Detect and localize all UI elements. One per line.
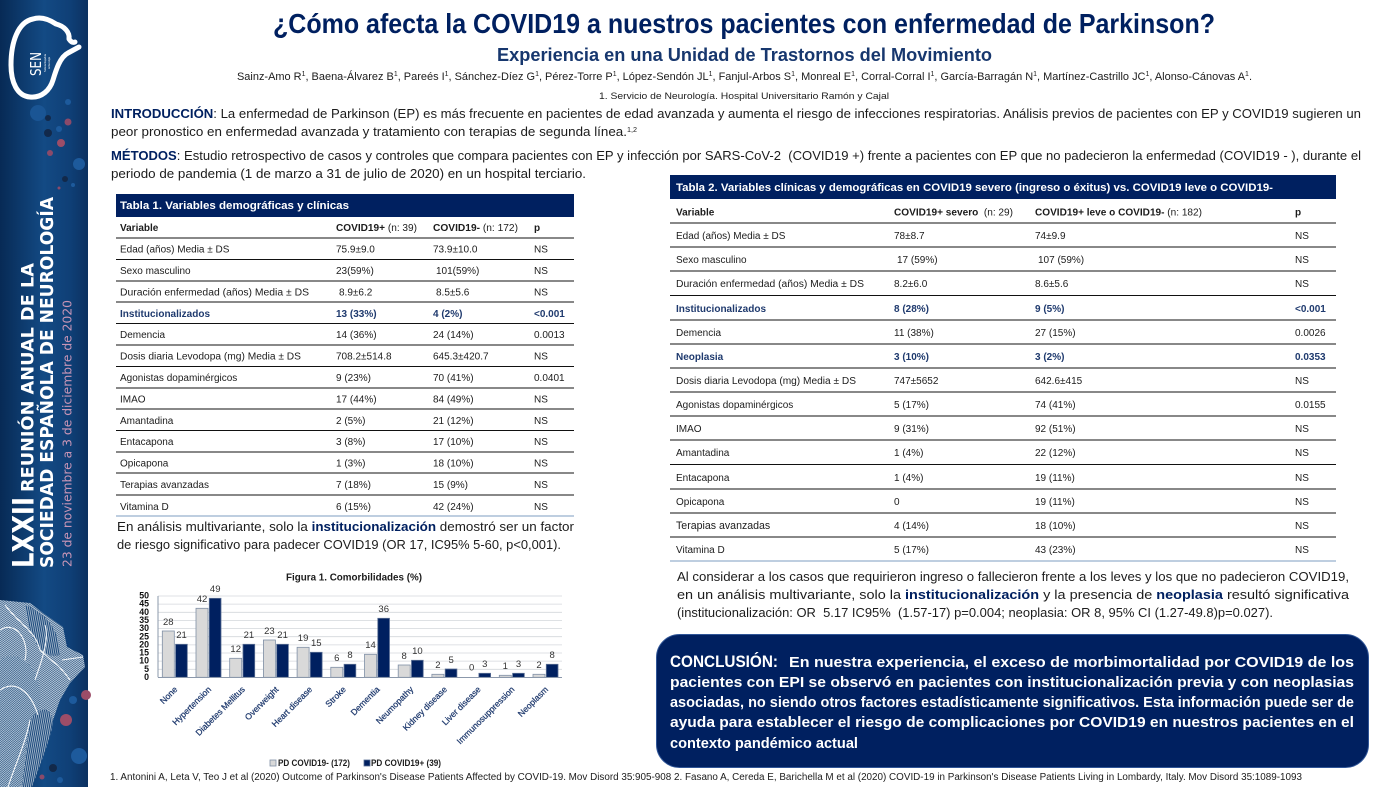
table 2 rows: NS — [1295, 424, 1309, 435]
table 2: severe vs mild COVID19 — [670, 175, 1336, 561]
multivariate note table 1 — [117, 519, 575, 552]
table 2 rows: NS — [1295, 448, 1309, 459]
table 1 rows: 2 (5%) — [336, 416, 365, 427]
chart legend: PD COVID19+ (39) — [371, 758, 441, 768]
table 2 rows: 74 (41%) — [1035, 400, 1076, 411]
y axis: 45 — [139, 599, 149, 609]
table 2 column headings: p — [1295, 208, 1301, 218]
x axis labels: None — [158, 684, 180, 706]
introduction — [111, 106, 1361, 139]
chart title: Figura 1. Comorbilidades (%) — [286, 572, 422, 584]
table 1 header bar: Tabla 1. Variables demográficas y clínicas — [120, 200, 349, 212]
table 2 rows: NS — [1295, 279, 1309, 290]
table 2 rows: 4 (14%) — [894, 521, 929, 532]
decorative dots bottom — [40, 690, 91, 783]
data labels: 10 — [412, 646, 423, 657]
table 1 rows: NS — [534, 244, 548, 256]
table 2 rows: 22 (12%) — [1035, 448, 1076, 459]
table 1 rows: NS — [534, 416, 548, 427]
y axis: 25 — [139, 631, 149, 641]
table 1 rows: NS — [534, 288, 548, 298]
data labels: 5 — [448, 655, 454, 666]
data labels: 21 — [176, 630, 187, 641]
table 2 rows: NS — [1295, 497, 1309, 508]
table 2 rows: Opicapona — [676, 497, 725, 508]
table 2 rows: 5 (17%) — [894, 400, 929, 411]
data labels: 6 — [334, 653, 339, 664]
table 1 rows: NS — [534, 352, 548, 362]
x axis labels: Heart disease — [270, 684, 314, 729]
callout: conclusion: asociadas, no siendo otros factores estadísticamente significativos. Esta información puede ser de — [670, 695, 1354, 711]
data labels: 2 — [435, 660, 441, 671]
table 2 rows: Sexo masculino — [676, 255, 747, 266]
table 1 rows: <0.001 — [534, 309, 565, 320]
decorative dots top — [30, 99, 85, 190]
table 2 rows: Agonistas dopaminérgicos — [676, 400, 793, 411]
methods: periodo de pandemia (1 de marzo a 31 de julio de 2020) en un hospital terciario. — [111, 166, 586, 181]
table 2 rows: 3 (2%) — [1035, 352, 1064, 363]
table 2 rows: Institucionalizados — [676, 304, 766, 315]
icon: SEN logo: de Neurología — [47, 57, 51, 69]
table 1 rows: NS — [534, 480, 548, 491]
table 1 rows: Sexo masculino — [120, 266, 191, 277]
data labels: 36 — [378, 604, 389, 615]
data labels: 42 — [197, 594, 207, 605]
y axis — [139, 590, 158, 682]
methods — [111, 148, 1361, 181]
x axis labels: Neumopathy — [374, 684, 416, 726]
table 2 rows: 0.0155 — [1295, 400, 1326, 411]
chart legend — [270, 758, 441, 768]
table 2 rows: 74±9.9 — [1035, 231, 1066, 242]
data labels: 8 — [402, 651, 407, 662]
x axis labels: Hypertension — [170, 684, 213, 727]
table 1 rows: 23(59%) — [336, 266, 374, 277]
y axis: 15 — [139, 648, 149, 658]
table 2 rows: 18 (10%) — [1035, 521, 1076, 532]
data labels: 0 — [469, 662, 474, 674]
table 1 rows: 17 (44%) — [336, 394, 377, 406]
data labels: 23 — [264, 626, 275, 637]
table 1 rows: Entacapona — [120, 437, 174, 448]
data labels: 21 — [277, 630, 288, 641]
table 1 rows: 18 (10%) — [433, 458, 474, 470]
table 1 rows: 42 (24%) — [433, 502, 474, 513]
table 1 rows: NS — [534, 394, 548, 406]
table 1 rows: 0.0401 — [534, 373, 565, 384]
congress name vertical: REUNIÓN ANUAL DE LA — [18, 263, 38, 492]
figure 1: comorbidities bar chart — [139, 572, 562, 768]
y axis: 50 — [139, 590, 149, 600]
data labels: 8 — [347, 650, 353, 661]
table 1 column headings: Variable — [120, 223, 159, 234]
subtitle: Experiencia en una Unidad de Trastornos del Movimiento — [497, 44, 992, 65]
table 2 rows: 9 (5%) — [1035, 304, 1064, 315]
callout: conclusion: contexto pandémico actual — [670, 736, 858, 752]
icon: brain illustration — [0, 600, 85, 787]
table 2 rows: Vitamina D — [676, 545, 725, 556]
table 2 rows: 1 (4%) — [894, 473, 923, 484]
table 2 rows: Neoplasia — [676, 352, 724, 363]
table 1 rows: 3 (8%) — [336, 437, 365, 448]
multivariate note table 1: En análisis multivariante, solo la institucionalización demostró ser un factor — [117, 519, 575, 534]
table 1 rows: 17 (10%) — [433, 437, 474, 448]
icon: SEN logo: SEN — [27, 52, 45, 76]
table 1 column headings: COVID19- (n: 172) — [433, 223, 518, 234]
icon: SEN logo — [11, 18, 79, 97]
table 1 rows: Vitamina D — [120, 502, 169, 513]
table 2 header bar: Tabla 2. Variables clínicas y demográficas en COVID19 severo (ingreso o éxitus) vs. COVID19 leve o COVID19- — [676, 182, 1273, 194]
data labels: 14 — [365, 640, 376, 651]
table 1 column headings — [120, 223, 540, 234]
multivariate note table 1: de riesgo significativo para padecer COVID19 (OR 17, IC95% 5-60, p<0,001). — [117, 537, 561, 552]
y axis: 30 — [139, 623, 149, 633]
table 2 rows: 27 (15%) — [1035, 328, 1076, 339]
y axis: 10 — [139, 656, 149, 666]
table 2 column headings: COVID19+ leve o COVID19- (n: 182) — [1035, 208, 1202, 218]
table 2 rows: NS — [1295, 255, 1309, 266]
table 1 rows: NS — [534, 266, 548, 277]
data labels: 3 — [516, 659, 521, 670]
table 2 rows: 1 (4%) — [894, 448, 923, 459]
data labels: 49 — [210, 584, 220, 595]
bars PD COVID19- — [162, 608, 545, 677]
table 2 rows: NS — [1295, 545, 1309, 556]
x axis labels: Overweight — [243, 684, 281, 722]
table 2 rows: Terapias avanzadas — [676, 520, 770, 532]
table 2 rows: NS — [1295, 376, 1309, 387]
x axis labels: Kidney disease — [401, 684, 449, 733]
table 1 rows — [120, 244, 565, 513]
y axis: 35 — [139, 615, 149, 625]
x axis labels: Dementia — [349, 684, 382, 717]
data labels: 12 — [230, 644, 241, 655]
table 1 rows: 6 (15%) — [336, 502, 371, 513]
table 1 rows: 8.9±6.2 — [339, 288, 373, 298]
table 2 rows: 19 (11%) — [1035, 497, 1075, 508]
y axis: 0 — [144, 672, 149, 682]
table 2 rows: 17 (59%) — [897, 255, 938, 266]
table 2 rows: Demencia — [676, 328, 721, 339]
references: 1. Antonini A, Leta V, Teo J et al (2020) Outcome of Parkinson's Disease Patients Affected by COVID-19. Mov Disord 35:905-908 2. Fasano A, Cereda E, Barichella M et al (2020) COVID-19 in Parkinson's Disease Patients Living in Lombardy, Italy. Mov Disord 35:1089-1093 — [110, 772, 1302, 783]
table 2 column headings: COVID19+ severo (n: 29) — [894, 208, 1013, 218]
table 1 rows: 708.2±514.8 — [336, 352, 392, 362]
data labels: 21 — [244, 630, 254, 641]
table 1 rows: 70 (41%) — [433, 373, 474, 384]
multivariate note table 2 — [677, 569, 1350, 620]
title: ¿Cómo afecta la COVID19 a nuestros pacientes con enfermedad de Parkinson? — [273, 8, 1215, 39]
table 2 column headings — [676, 208, 1301, 218]
table 1 rows: 4 (2%) — [433, 309, 462, 320]
callout: conclusion: pacientes con EPI se observó en pacientes con institucionalización previa y con neoplasias — [670, 675, 1354, 691]
table 1 rows: NS — [534, 502, 548, 513]
y axis: 5 — [144, 664, 149, 674]
x axis labels — [158, 684, 550, 746]
methods: MÉTODOS: Estudio retrospectivo de casos y controles que compara pacientes con EP y infección por SARS-CoV-2 (COVID19 +) frente a pacientes con EP que no padecieron la enfermedad (COVID19 - ), durante el — [111, 148, 1361, 163]
table 1 rows: Terapias avanzadas — [120, 480, 209, 491]
x axis labels: Diabetes Mellitus — [193, 684, 247, 738]
table 2 rows: 0 — [894, 497, 900, 508]
table 1 rows: 14 (36%) — [336, 330, 377, 341]
table 1 rows: 24 (14%) — [433, 330, 474, 341]
table 2 rows: 43 (23%) — [1035, 545, 1076, 556]
x axis labels: Immunosuppression — [455, 684, 517, 746]
data labels: 15 — [311, 638, 322, 649]
x axis labels: Stroke — [323, 684, 348, 709]
table 1: demographic and clinical variables — [116, 194, 574, 516]
data labels: 28 — [163, 617, 174, 628]
table 2 rows: NS — [1295, 231, 1309, 242]
table 2 header bar — [670, 175, 1336, 199]
multivariate note table 2: en un análisis multivariante, solo la institucionalización y la presencia de neoplasia resultó significativa — [677, 587, 1350, 602]
data labels: 8 — [550, 650, 555, 661]
table 1 rows: 9 (23%) — [336, 373, 371, 384]
callout: conclusion — [656, 634, 1368, 768]
congress name vertical: LXXII — [6, 497, 40, 568]
table 1 rows: Opicapona — [120, 458, 169, 470]
introduction: INTRODUCCIÓN: La enfermedad de Parkinson (EP) es más frecuente en pacientes de edad avanzada y aumenta el riesgo de infecciones respiratorias. Análisis previos de pacientes con EP y COVID19 sugieren un — [111, 106, 1361, 121]
table 1 rows: Institucionalizados — [120, 309, 210, 320]
table 1 rows: 13 (33%) — [336, 309, 377, 320]
table 2 rows: 0.0353 — [1295, 352, 1326, 363]
table 1 column headings: COVID19+ (n: 39) — [336, 223, 417, 234]
table 2 rows — [676, 231, 1326, 556]
table 1 rows: 0.0013 — [534, 330, 565, 341]
table 1 rows: IMAO — [120, 394, 146, 406]
table 2 rows: 11 (38%) — [894, 328, 934, 339]
table 1 rows: Amantadina — [120, 416, 174, 427]
table 2 rows: 8.2±6.0 — [894, 279, 928, 290]
table 2 rows: Edad (años) Media ± DS — [676, 231, 786, 242]
table 1 rows: 1 (3%) — [336, 458, 365, 470]
table 2 rows: Duración enfermedad (años) Media ± DS — [676, 279, 864, 290]
data labels: 19 — [298, 633, 308, 644]
x axis labels: Neoplasm — [516, 684, 550, 719]
table 2 rows: <0.001 — [1295, 304, 1326, 315]
table 2 rows: 78±8.7 — [894, 231, 925, 242]
table 1 rows: 73.9±10.0 — [433, 244, 478, 256]
table 2 rows: 747±5652 — [894, 376, 939, 387]
table 1 rows: Dosis diaria Levodopa (mg) Media ± DS — [120, 352, 301, 362]
x axis labels: Liver disease — [440, 684, 483, 727]
table 1 rows: Duración enfermedad (años) Media ± DS — [120, 288, 309, 298]
table 1 rows: 21 (12%) — [433, 416, 474, 427]
table 2 rows: 9 (31%) — [894, 424, 929, 435]
data labels: 1 — [503, 661, 508, 672]
data labels: 3 — [482, 659, 487, 670]
table 2 rows: 92 (51%) — [1035, 424, 1076, 435]
table 2 rows: 8 (28%) — [894, 304, 929, 315]
table 2 rows: 0.0026 — [1295, 328, 1326, 339]
sidebar: congress banner — [0, 0, 91, 787]
table 1 rows: 75.9±9.0 — [336, 244, 375, 256]
multivariate note table 2: (institucionalización: OR 5.17 IC95% (1.57-17) p=0.004; neoplasia: OR 8, 95% CI (1.27-49.8)p=0.027). — [677, 605, 1273, 620]
table 1 rows: 101(59%) — [436, 266, 479, 277]
table 2 rows: NS — [1295, 521, 1309, 532]
table 2 rows: 642.6±415 — [1035, 376, 1083, 387]
table 1 rows: 8.5±5.6 — [436, 288, 470, 298]
table 1 header bar — [116, 194, 574, 217]
authors: Sainz-Amo R1, Baena-Álvarez B1, Pareés I1, Sánchez-Díez G1, Pérez-Torre P1, López-Sendón JL1, Fanjul-Arbos S1, Monreal E1, Corral-Corral I1, García-Barragán N1, Martínez-Castrillo JC1, Alonso-Cánovas A1. — [237, 70, 1252, 83]
introduction: peor pronostico en enfermedad avanzada y tratamiento con terapias de segunda línea. 1,2 — [111, 124, 637, 139]
bars PD COVID19+ — [158, 598, 562, 678]
table 2 rows: Dosis diaria Levodopa (mg) Media ± DS — [676, 376, 856, 387]
table 2 rows: 19 (11%) — [1035, 473, 1075, 484]
table 1 rows: NS — [534, 437, 548, 448]
table 2 rows: 107 (59%) — [1038, 255, 1084, 266]
table 1 rows: 645.3±420.7 — [433, 352, 489, 362]
table 1 rows: 84 (49%) — [433, 394, 474, 406]
congress name vertical — [6, 197, 74, 568]
table 1 rows: Demencia — [120, 330, 165, 341]
callout: conclusion: ayuda para establecer el riesgo de complicaciones por COVID19 en nuestros pacientes en el — [670, 715, 1354, 731]
y axis: 40 — [139, 607, 149, 617]
table 2 rows: Entacapona — [676, 473, 730, 484]
callout: conclusion: En nuestra experiencia, el exceso de morbimortalidad por COVID19 de los — [789, 655, 1354, 671]
table 1 rows: Edad (años) Media ± DS — [120, 244, 230, 256]
y axis: 20 — [139, 639, 149, 649]
icon: SEN logo: Sociedad Española — [43, 54, 47, 72]
table 2 rows: 3 (10%) — [894, 352, 929, 363]
congress name vertical: 23 de noviembre a 3 de diciembre de 2020 — [60, 300, 74, 567]
multivariate note table 2: Al considerar a los casos que requirieron ingreso o fallecieron frente a los leves y los que no padecieron COVID19, — [677, 569, 1349, 584]
table 2 rows: 8.6±5.6 — [1035, 279, 1069, 290]
affiliation: 1. Servicio de Neurología. Hospital Universitario Ramón y Cajal — [599, 90, 889, 101]
data labels — [163, 584, 555, 674]
table 1 rows: 15 (9%) — [433, 480, 468, 491]
table 1 rows: 7 (18%) — [336, 480, 371, 491]
table 2 rows: IMAO — [676, 424, 702, 435]
congress name vertical: SOCIEDAD ESPAÑOLA DE NEUROLOGÍA — [35, 197, 58, 568]
table 1 column headings: p — [534, 223, 540, 234]
table 2 rows: NS — [1295, 473, 1309, 484]
table 2 rows: Amantadina — [676, 448, 730, 459]
callout: conclusion: CONCLUSIÓN: — [670, 652, 778, 671]
table 2 rows: 5 (17%) — [894, 545, 929, 556]
table 2 column headings: Variable — [676, 208, 715, 218]
chart legend: PD COVID19- (172) — [278, 758, 350, 768]
data labels: 2 — [536, 660, 542, 671]
table 1 rows: NS — [534, 458, 548, 470]
table 1 rows: Agonistas dopaminérgicos — [120, 373, 237, 384]
